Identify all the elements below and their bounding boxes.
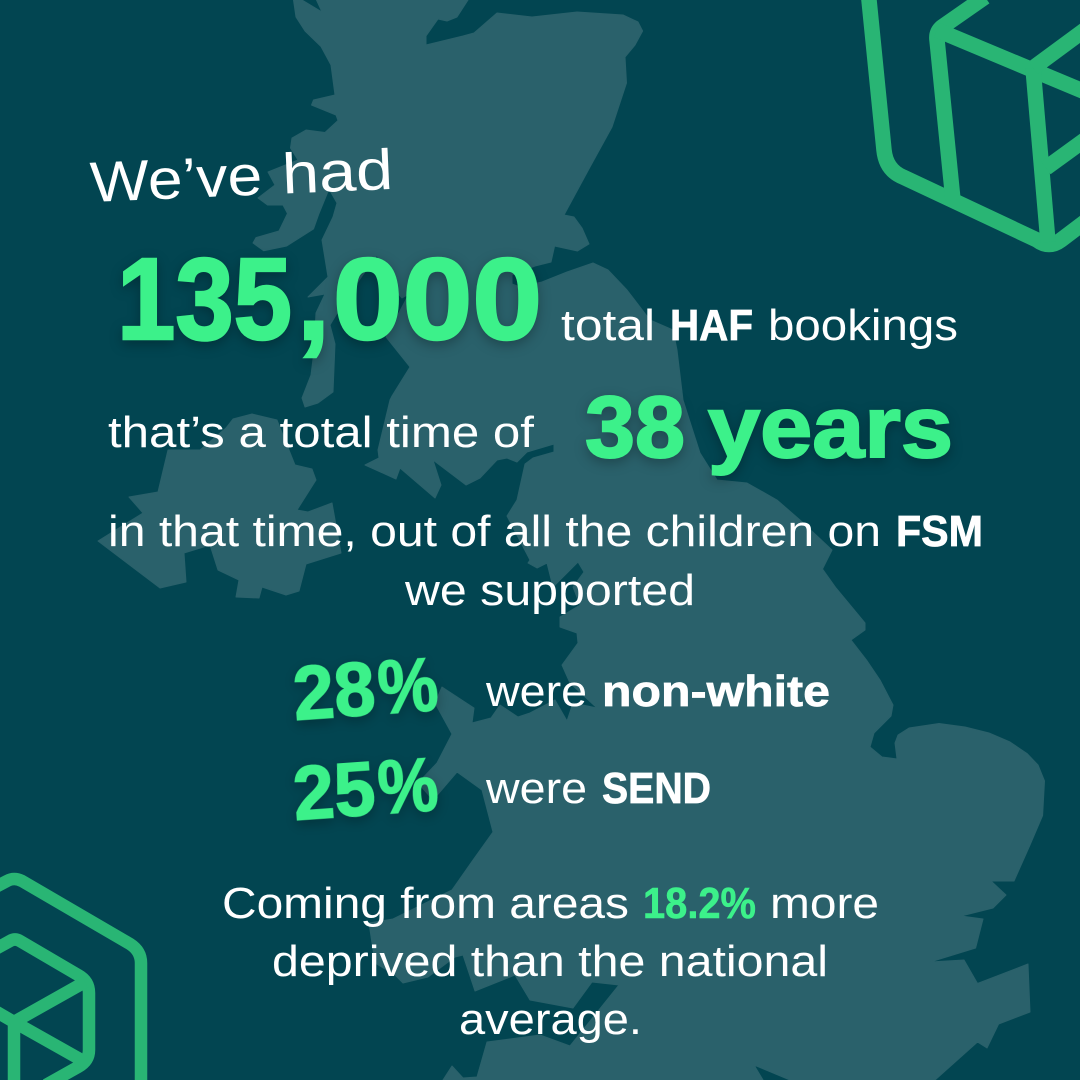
text: we supported: we supported — [404, 566, 695, 615]
map: Ireland — [98, 414, 341, 598]
text: total HAF bookings: total — [561, 301, 655, 350]
text: total HAF bookings — [561, 301, 958, 350]
stat: 135,000: 000 — [333, 234, 542, 364]
text: were SEND: were — [485, 764, 587, 813]
text: We've had — [89, 138, 394, 215]
stat: 28% — [290, 642, 441, 737]
stat: 38 years: years — [708, 379, 953, 476]
text: were SEND: SEND — [602, 764, 711, 813]
text: Coming from areas 18.2% more deprived than the national average.: deprived than the national — [272, 937, 828, 986]
text: Coming from areas 18.2% more deprived than the national average.: average. — [459, 995, 642, 1044]
text: were SEND — [485, 764, 711, 813]
text: total HAF bookings: bookings — [768, 301, 958, 350]
text: Coming from areas 18.2% more deprived than the national average.: 18.2% — [643, 879, 756, 928]
text: in that time, out of all the children on FSM: in that time, out of all the children on — [108, 507, 881, 556]
text: that's a total time of: that’s a total time of — [108, 408, 535, 457]
map: Great Britain — [253, 0, 1044, 1080]
stat: 135,000: 135 — [117, 234, 292, 364]
text: total HAF bookings: HAF — [670, 301, 753, 350]
stat: 28%: 28 — [290, 646, 378, 737]
text: in that time, out of all the children on FSM: FSM — [896, 507, 983, 556]
text: were non-white: non-white — [602, 667, 830, 716]
text: were non-white: were — [485, 667, 587, 716]
stat: 135,000 — [117, 234, 542, 364]
text: were non-white — [485, 667, 830, 716]
text: We've had: had — [281, 138, 394, 207]
text: Coming from areas 18.2% more deprived than the national average.: more — [770, 879, 879, 928]
stat: 25%: 25 — [290, 746, 378, 837]
text: We've had: We’ve — [89, 144, 263, 215]
stat: 25% — [290, 742, 441, 837]
icon: box outline top right — [868, 0, 1080, 244]
stat: 135,000: , — [297, 234, 330, 364]
stat: 25%: % — [375, 742, 441, 831]
stat: 38 years — [585, 379, 953, 476]
stat: 38 years: 38 — [585, 379, 685, 476]
text: Coming from areas 18.2% more deprived than the national average.: Coming from areas — [222, 879, 629, 928]
stat: 28%: % — [375, 642, 441, 731]
icon: box outline bottom left — [0, 879, 141, 1080]
text: Coming from areas 18.2% more deprived than the national average. — [222, 879, 879, 1044]
